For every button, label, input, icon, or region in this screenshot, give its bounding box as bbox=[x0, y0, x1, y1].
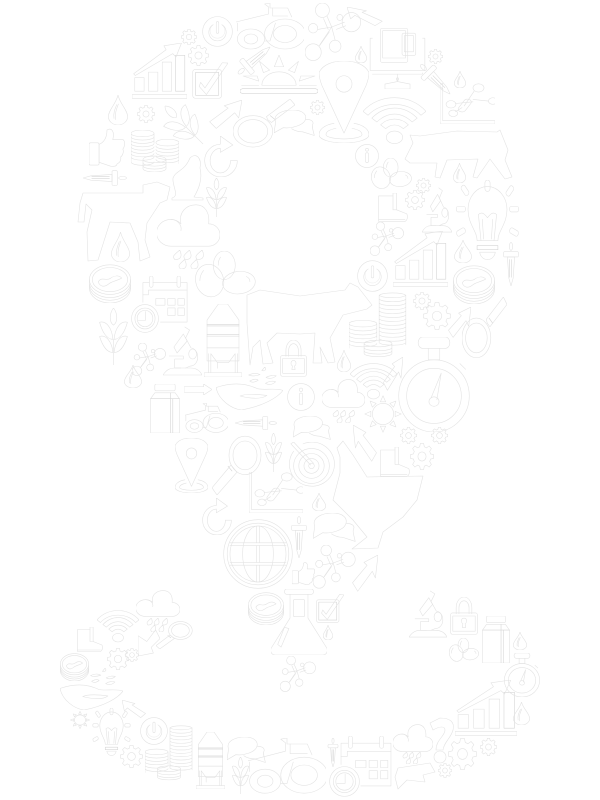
icon: tractor bbox=[248, 738, 328, 793]
icon: coins bbox=[131, 130, 179, 172]
icon: stopwatch bbox=[399, 337, 469, 432]
icon: magnifier bbox=[156, 622, 192, 649]
icon: info bbox=[288, 384, 314, 410]
icon: petri dish bbox=[89, 265, 131, 303]
icon: gear bbox=[416, 178, 431, 193]
icon: thumbs up bbox=[89, 129, 125, 166]
icon: arrow bbox=[122, 700, 146, 718]
icon group: upper right bbox=[310, 61, 519, 358]
icon: hand bbox=[216, 384, 283, 410]
icon: light bulb bbox=[456, 180, 519, 260]
icon: boot bbox=[379, 193, 407, 221]
icon: rain drops bbox=[403, 752, 421, 764]
icon: speech bubbles bbox=[227, 737, 265, 762]
icon: devices bbox=[370, 28, 425, 89]
icon: sun bbox=[365, 396, 401, 432]
icon: cloud bbox=[393, 725, 433, 751]
icon: wifi bbox=[350, 364, 397, 399]
icon: drop bbox=[453, 163, 466, 183]
icon: speech bubbles bbox=[313, 513, 355, 541]
icon: checkbox bbox=[193, 63, 228, 98]
icon: light bulb bbox=[93, 708, 130, 756]
icon: padlock bbox=[451, 597, 477, 634]
icon: microscope bbox=[422, 188, 452, 232]
icon: arrow right bbox=[184, 384, 212, 395]
icon: horizontal dropper bbox=[235, 416, 277, 430]
icon: gear bbox=[448, 738, 477, 770]
icon: gear bbox=[428, 49, 443, 64]
icon: silo bbox=[196, 732, 225, 789]
icon: pig bbox=[405, 130, 512, 179]
icon: wifi bbox=[363, 98, 426, 144]
icon: dropper bbox=[232, 40, 276, 81]
icon: arrow bbox=[347, 7, 382, 26]
icon: stopwatch bbox=[504, 653, 540, 697]
icon: drop bbox=[312, 493, 326, 511]
icon: bar chart with arrow bbox=[132, 43, 187, 98]
icon: drop bbox=[355, 46, 367, 63]
icon: gear bbox=[137, 105, 155, 123]
icon: animal shape bbox=[395, 763, 435, 789]
icon: sun bbox=[70, 711, 90, 729]
icon: hen bbox=[172, 156, 203, 200]
icon: gear bbox=[125, 648, 139, 662]
icon: gear bbox=[400, 427, 417, 444]
icon: drop bbox=[323, 625, 333, 640]
icon: calendar bbox=[143, 276, 187, 322]
icon: wheat bbox=[232, 757, 249, 794]
icon: drop bbox=[108, 95, 128, 125]
icon: wifi bbox=[97, 610, 139, 642]
icon: small tractor bbox=[185, 403, 229, 432]
icon group: base ring, right bbox=[328, 591, 540, 796]
icon: wheat sprig bbox=[154, 95, 214, 155]
icon: ring bbox=[434, 751, 446, 763]
icon: gear bbox=[413, 292, 431, 310]
icon: target bbox=[289, 442, 334, 486]
icon: power button bbox=[203, 17, 232, 46]
icon: molecule bbox=[132, 343, 166, 376]
icon group: base ring, left bbox=[60, 591, 328, 794]
icon: drop bbox=[513, 702, 530, 725]
icon: bottle bbox=[483, 616, 509, 663]
icon: padlock bbox=[281, 340, 306, 376]
icon: boot bbox=[78, 627, 102, 652]
icon: tractor bbox=[236, 3, 305, 49]
icon: magnifier bbox=[233, 99, 295, 147]
icon: horizontal dropper bbox=[83, 170, 127, 186]
icon: sunrise bbox=[240, 55, 318, 94]
icon: speech bubbles bbox=[293, 416, 330, 440]
icon: checkbox bbox=[317, 595, 344, 622]
icon: arrow bbox=[383, 357, 403, 390]
icon: drop bbox=[124, 365, 142, 388]
icon: rain drops bbox=[333, 410, 354, 423]
icon: molecule bbox=[313, 545, 355, 588]
icon: refresh arrow bbox=[205, 136, 237, 177]
icon: drop bbox=[111, 232, 130, 262]
icon: gear bbox=[431, 427, 448, 444]
icon group: top arc of pin bbox=[132, 3, 497, 124]
icon: petri dish bbox=[453, 266, 495, 304]
icon: chart with molecule bbox=[249, 472, 305, 513]
icon: eggs bbox=[448, 638, 480, 662]
icon: curved hook shape bbox=[430, 718, 453, 750]
icon: info bbox=[355, 144, 379, 168]
icon: calf outline bbox=[78, 182, 170, 261]
icon: small gear bbox=[181, 29, 197, 45]
icon: gear bbox=[410, 443, 434, 470]
icon: location pin bbox=[319, 61, 369, 143]
icon: gear bbox=[438, 763, 452, 778]
icon: bottle bbox=[151, 384, 179, 433]
icon: cloud bbox=[136, 591, 180, 616]
icon: wheat bbox=[265, 433, 282, 472]
icon: microscope bbox=[163, 327, 202, 375]
icon: large gear bbox=[188, 45, 209, 66]
icon: sprouts bbox=[249, 367, 276, 384]
icon: thumbs up bbox=[292, 563, 315, 585]
icon: chart with molecule bbox=[440, 83, 497, 124]
icon: calendar bbox=[341, 736, 391, 786]
icon: gear bbox=[405, 190, 425, 210]
icon: dropper bbox=[414, 58, 457, 101]
icon: magnifier bbox=[462, 297, 507, 358]
icon: boot bbox=[381, 447, 409, 476]
icon: rain drops bbox=[173, 250, 203, 269]
icon group: right centre bbox=[322, 337, 469, 549]
icon: location pin bbox=[175, 438, 208, 493]
icon: gear bbox=[423, 302, 451, 330]
icon: globe bbox=[224, 520, 292, 588]
icon: large hen outline bbox=[333, 441, 423, 549]
icon: speech bubbles bbox=[274, 110, 314, 135]
icon: hand bbox=[60, 685, 123, 710]
icon: gear bbox=[120, 745, 143, 768]
icon: refresh arrow bbox=[203, 498, 231, 535]
icon: tall coins bbox=[349, 293, 406, 357]
icon group: upper left bbox=[78, 95, 314, 269]
icon group: stem of pin bbox=[175, 416, 378, 692]
icon: rain cloud bbox=[157, 205, 220, 246]
icon group: left centre bbox=[89, 251, 372, 433]
icon: clock bbox=[330, 767, 359, 796]
icon: drop bbox=[454, 71, 466, 88]
icon: dropper bbox=[503, 242, 519, 286]
icon: microscope bbox=[409, 591, 447, 637]
icon: drop bbox=[454, 240, 472, 263]
icon: arrow bbox=[353, 555, 378, 591]
icon: gear bbox=[107, 648, 129, 670]
icon: cloud bbox=[322, 380, 365, 407]
icon: arrow bbox=[210, 100, 242, 128]
icon: wheat bbox=[206, 178, 227, 217]
icon: gear bbox=[310, 100, 325, 115]
icon: sprouts bbox=[91, 668, 115, 685]
icon: drop bbox=[513, 632, 527, 650]
icon: dropper bbox=[291, 516, 307, 558]
icon: petri dish bbox=[60, 654, 89, 681]
icon: drop bbox=[337, 350, 351, 372]
icon: large cow outline bbox=[247, 283, 372, 365]
icon: dropper bbox=[328, 738, 338, 767]
icon: silo bbox=[204, 304, 242, 377]
icon: arrow bbox=[353, 425, 377, 461]
icon: power button bbox=[141, 718, 167, 744]
icon: arrow bbox=[138, 630, 160, 656]
icon: arrow bbox=[448, 307, 471, 337]
icon: coins bbox=[145, 726, 192, 780]
icon: eggs bbox=[370, 158, 413, 190]
icon: rain drops bbox=[147, 618, 168, 632]
icon: magnifier bbox=[212, 436, 261, 495]
icon: flask bbox=[271, 589, 327, 655]
icon: clock bbox=[132, 305, 158, 332]
icon: gear bbox=[480, 738, 497, 756]
icon: molecule bbox=[280, 656, 316, 692]
icon: bar chart bbox=[455, 680, 517, 735]
icon: petri dish bbox=[248, 593, 284, 625]
icon: molecule bbox=[370, 222, 404, 256]
icon: molecule bbox=[305, 3, 361, 61]
icon: bar chart bbox=[393, 231, 448, 286]
icon: eggs bbox=[193, 251, 258, 298]
icon: power button bbox=[358, 261, 387, 291]
icon: wheat bbox=[100, 308, 127, 365]
